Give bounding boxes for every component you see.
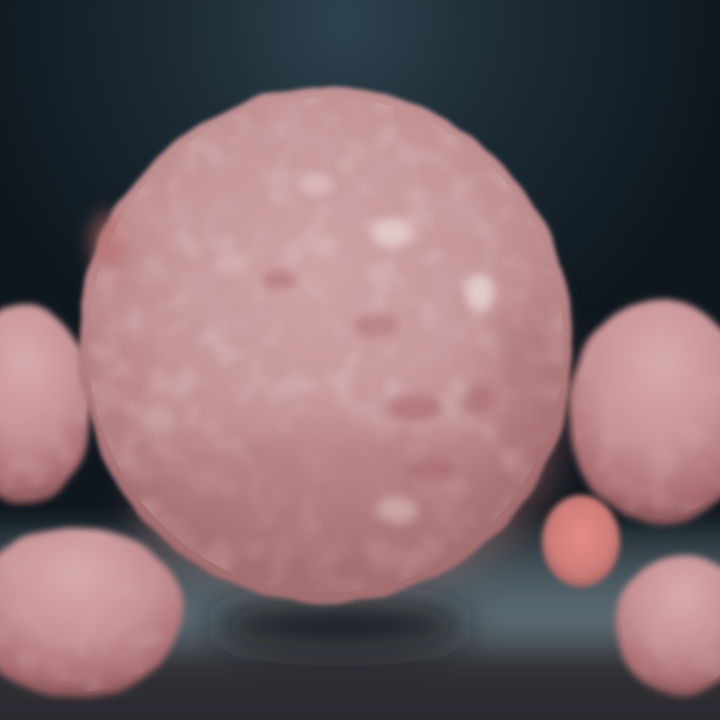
texture: mottling on side spheres	[0, 306, 720, 692]
sphere: bottom right foreground	[616, 555, 720, 695]
sphere: large central textured ball	[78, 87, 574, 603]
sphere: right background	[567, 300, 720, 524]
sphere: bottom left foreground	[0, 526, 182, 698]
surface: reflective floor	[0, 520, 720, 720]
sphere texture: pale mottling	[88, 97, 564, 593]
sphere texture: dark mottling	[88, 97, 564, 593]
sphere texture: pale highlights	[144, 173, 494, 523]
sphere shading: lower darker tone	[135, 430, 525, 590]
sphere texture: deep pits	[260, 270, 494, 480]
sphere: tiny coral	[542, 495, 620, 587]
sphere shading: lower right rim	[500, 290, 560, 510]
sphere body	[78, 87, 574, 603]
sphere: left background	[0, 305, 93, 505]
shadow: floor shadow under main sphere	[210, 601, 470, 649]
sphere edge accent: upper left coral rim	[90, 212, 126, 272]
